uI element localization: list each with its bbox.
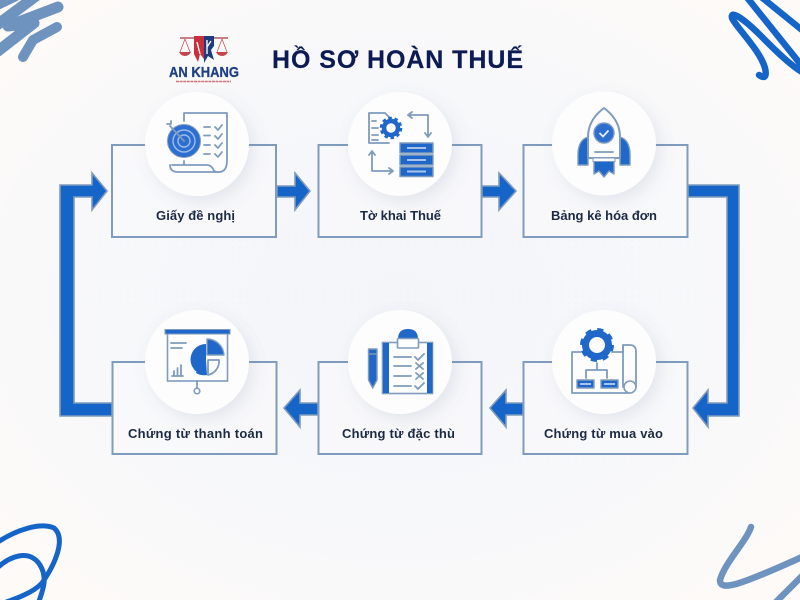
arrow: thanh toán to đề nghị (60, 173, 112, 416)
arrow: tờ khai to bảng kê (482, 173, 516, 210)
scribble: bottom left (0, 526, 59, 600)
scribble: top right (732, 0, 800, 77)
panel: Bảng kê hóa đơn (524, 92, 688, 237)
logo tagline strip (176, 80, 231, 82)
arrow: bảng kê to mua vào (688, 185, 739, 427)
label: Tờ khai Thuế (360, 208, 442, 223)
panel: Chứng từ đặc thù (318, 310, 482, 454)
icon: clipboard and pencil (368, 329, 432, 394)
label: Bảng kê hóa đơn (551, 208, 657, 223)
title: HỒ SƠ HOÀN THUẾ (272, 44, 523, 74)
panel: Tờ khai Thuế (318, 92, 482, 237)
label: Chứng từ đặc thù (342, 426, 455, 441)
panel: Giấy đề nghị (112, 92, 276, 237)
logo wordmark: AN KHANG (169, 64, 239, 81)
arrow: đề nghị to tờ khai (277, 173, 310, 210)
icon: gear and blueprint (572, 330, 636, 393)
logo: An Khang (169, 36, 239, 82)
panel: Chứng từ mua vào (524, 310, 688, 454)
label: Giấy đề nghị (156, 208, 235, 223)
label: Chứng từ thanh toán (128, 426, 263, 441)
scribble: top left (0, 0, 58, 57)
icon: rocket (578, 108, 630, 177)
arrow: đặc thù to thanh toán (284, 390, 318, 427)
icon: presentation board with pie chart (165, 330, 230, 394)
icon: form, gear and flow (369, 112, 433, 176)
scribble: bottom right (720, 527, 800, 600)
icon: target and checklist (167, 113, 227, 172)
panel: Chứng từ thanh toán (112, 310, 276, 454)
label: Chứng từ mua vào (544, 426, 663, 441)
logo scales (179, 36, 228, 63)
arrow: mua vào to đặc thù (490, 390, 523, 427)
